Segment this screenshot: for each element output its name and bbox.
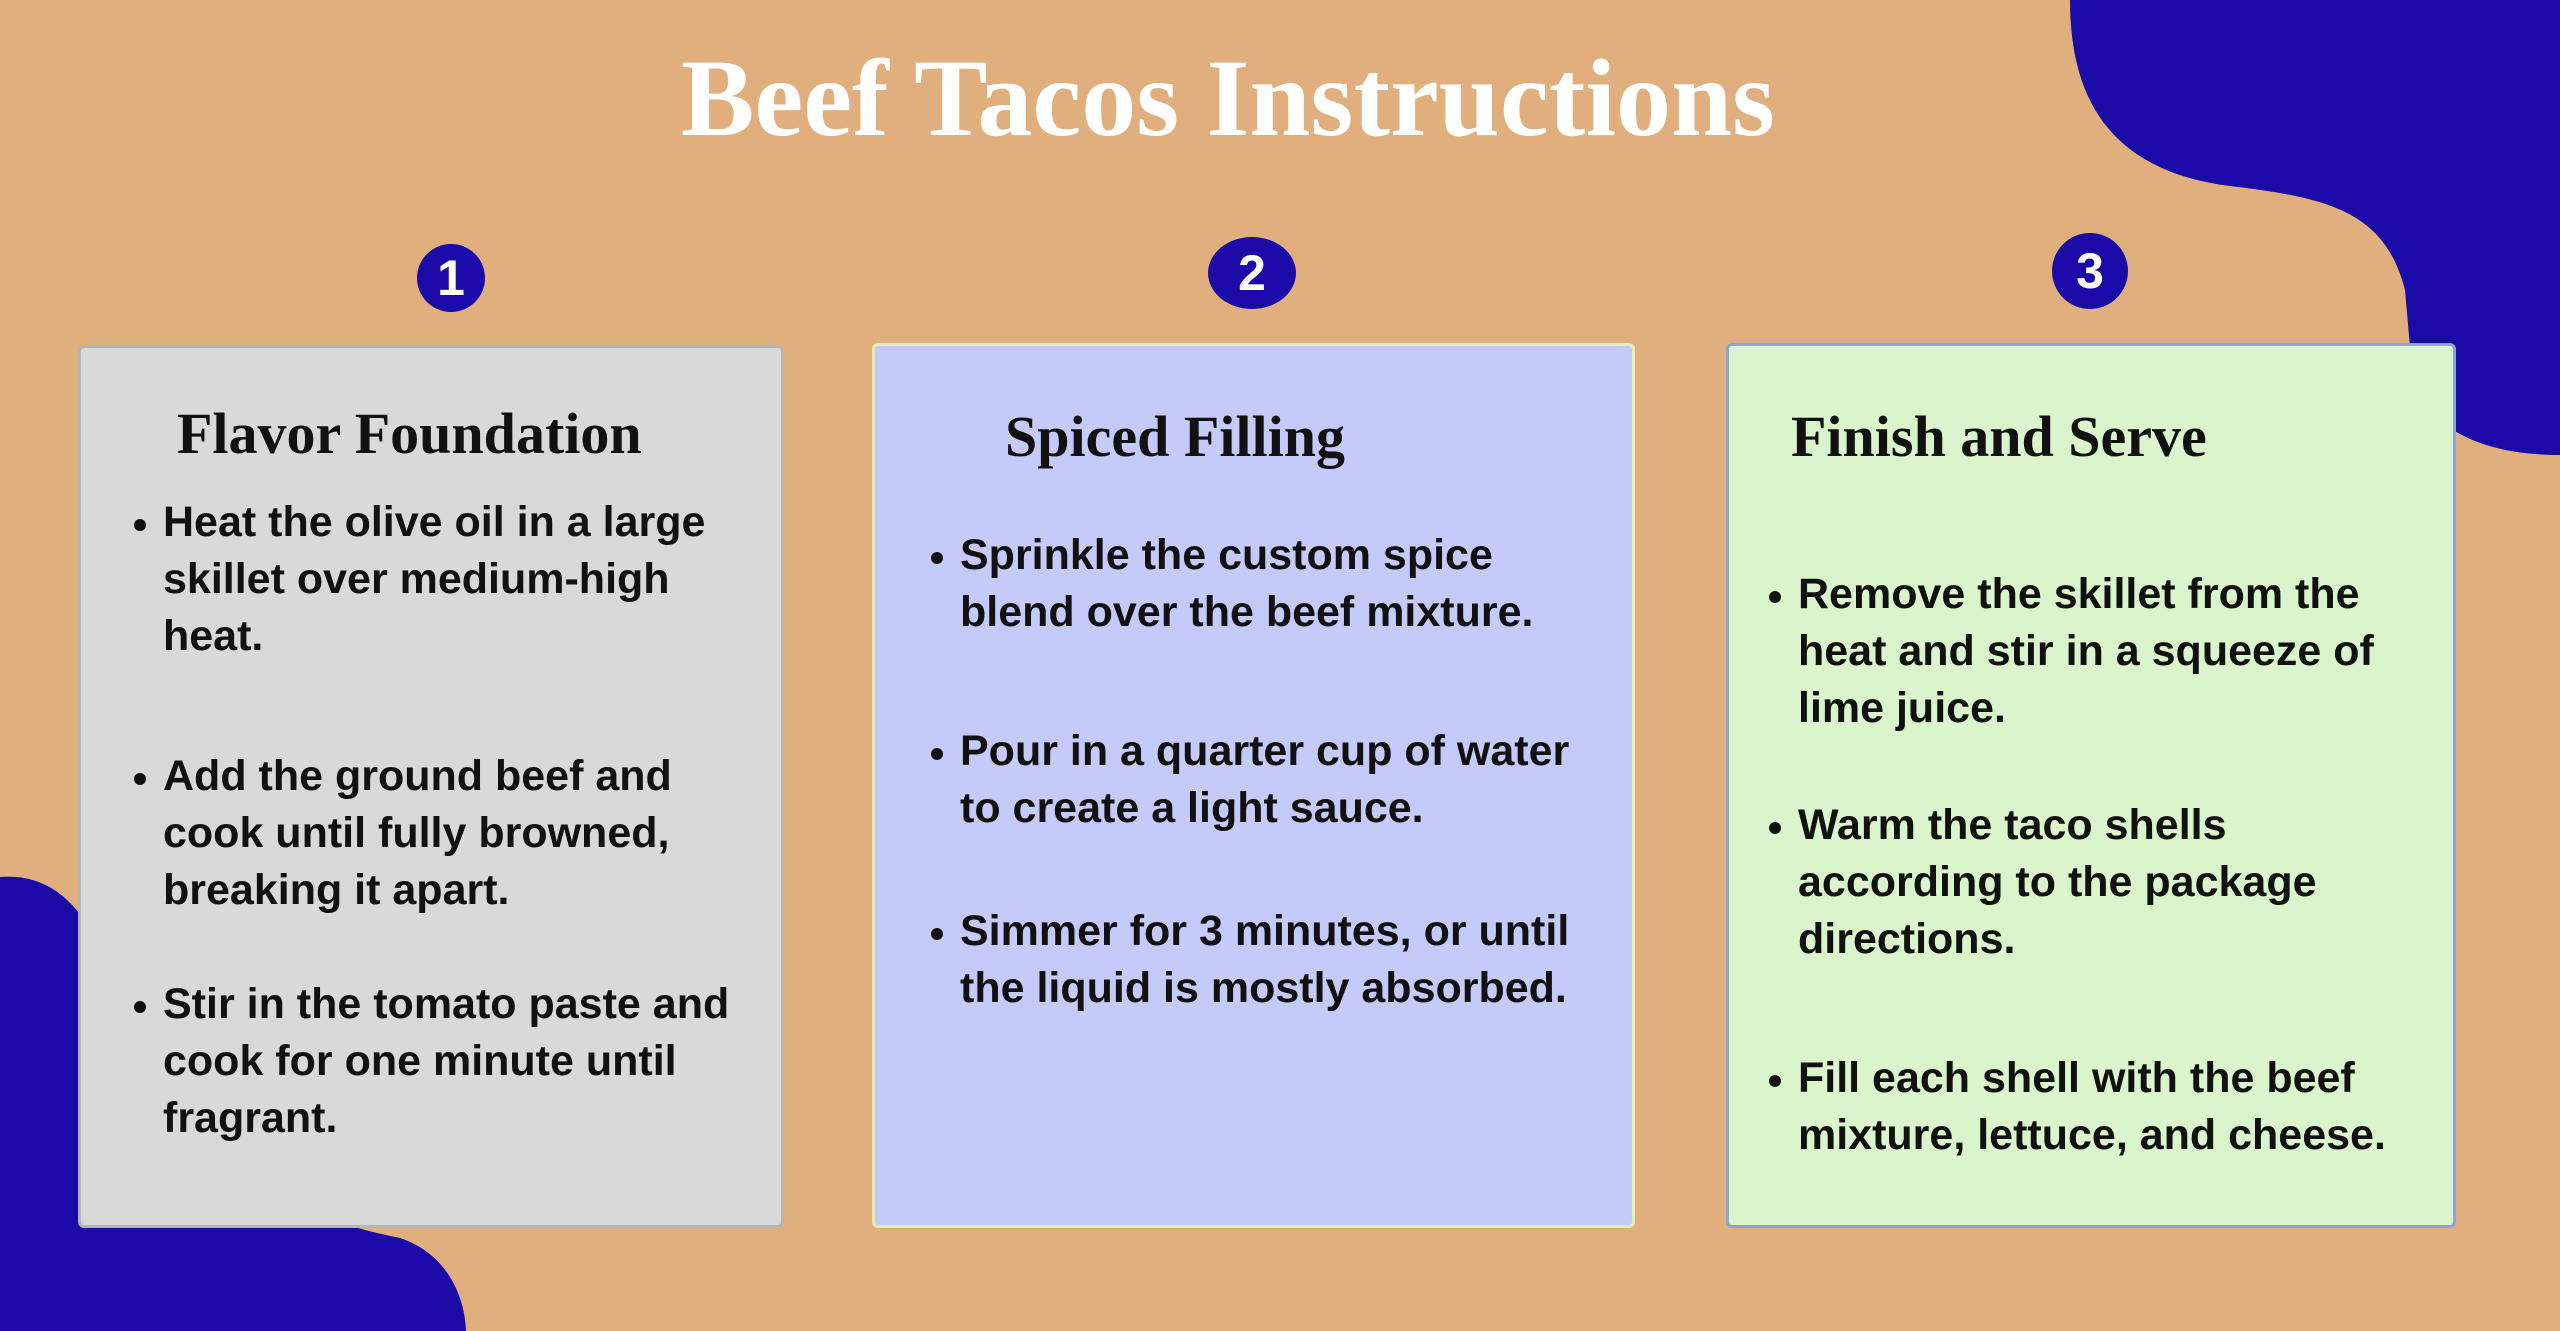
- panel: spiced filling: Sprinkle the custom spice: [960, 531, 1493, 579]
- title: Beef Tacos Instructions: [681, 37, 1775, 159]
- panel: spiced filling: Simmer for 3 minutes, or until: [960, 907, 1569, 955]
- panel: flavor foundation: Add the ground beef and: [163, 752, 672, 800]
- bullet 1: [134, 498, 705, 660]
- heading: Flavor Foundation: [177, 401, 642, 466]
- panel: finish and serve: Warm the taco shells: [1798, 801, 2227, 849]
- panel: flavor foundation: cook for one minute until: [163, 1037, 677, 1085]
- panel: flavor foundation: fragrant.: [163, 1094, 337, 1142]
- number badge 3: [2052, 233, 2128, 309]
- panel: flavor foundation: Stir in the tomato paste and: [163, 980, 729, 1028]
- panel: spiced filling: blend over the beef mixture.: [960, 588, 1533, 636]
- panel: flavor foundation: [78, 345, 784, 1228]
- heading: Spiced Filling: [1005, 404, 1345, 469]
- panel: finish and serve: Remove the skillet from the: [1798, 570, 2360, 618]
- number badge 3: 3: [2076, 243, 2104, 299]
- panel: finish and serve: according to the package: [1798, 858, 2317, 906]
- number badge 2: [1208, 237, 1296, 309]
- panel: flavor foundation: cook until fully browned,: [163, 809, 669, 857]
- bullet 2: [931, 727, 1569, 832]
- panel: spiced filling: Pour in a quarter cup of water: [960, 727, 1569, 775]
- panel: finish and serve: [1726, 343, 2456, 1228]
- heading: Finish and Serve: [1791, 404, 2207, 469]
- panel: spiced filling: [872, 343, 1635, 1228]
- panel: flavor foundation: breaking it apart.: [163, 866, 509, 914]
- number badge 1: [417, 244, 485, 312]
- panel: finish and serve: directions.: [1798, 915, 2015, 963]
- panel: spiced filling: the liquid is mostly absorbed.: [960, 964, 1567, 1012]
- panel: finish and serve: mixture, lettuce, and cheese.: [1798, 1111, 2386, 1159]
- bullet 3: [1769, 1054, 2386, 1159]
- panel: finish and serve: Fill each shell with the beef: [1798, 1054, 2355, 1102]
- bullet 2: [1769, 801, 2317, 963]
- panel: finish and serve: heat and stir in a squeeze of: [1798, 627, 2374, 675]
- bullet 2: [134, 752, 672, 914]
- bullet 3: [931, 907, 1569, 1012]
- bullet 3: [134, 980, 729, 1142]
- panel: spiced filling: to create a light sauce.: [960, 784, 1424, 832]
- bullet 1: [1769, 570, 2374, 732]
- panel: flavor foundation: skillet over medium-high: [163, 555, 670, 603]
- panel: finish and serve: lime juice.: [1798, 684, 2006, 732]
- bullet 1: [931, 531, 1533, 636]
- panel: flavor foundation: heat.: [163, 612, 263, 660]
- number badge 1: 1: [437, 250, 465, 306]
- panel: flavor foundation: Heat the olive oil in a large: [163, 498, 705, 546]
- number badge 2: 2: [1238, 245, 1266, 301]
